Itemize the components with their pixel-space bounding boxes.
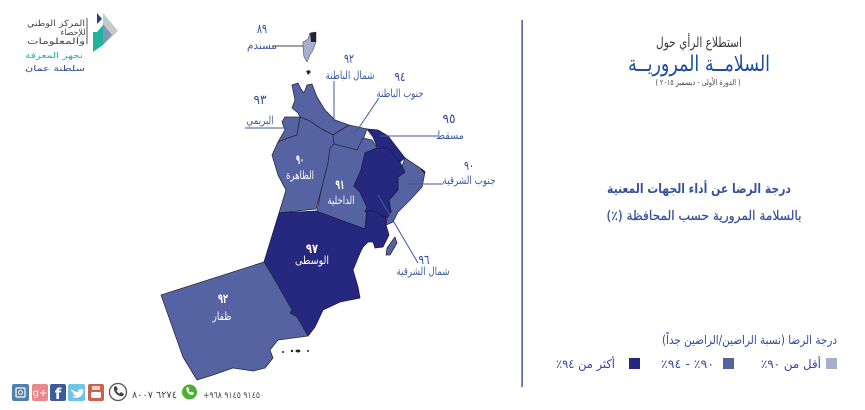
icon: instagram xyxy=(12,384,29,401)
legend title: درجة الرضا (نسبة الراضين/الراضين جداً) xyxy=(662,331,837,348)
label: South Batinah: جنوب الباطنة xyxy=(376,87,424,100)
chart subtitle: بالسلامة المرورية حسب المحافظة (٪) xyxy=(606,209,802,224)
label: Dhahirah xyxy=(286,153,314,182)
legend item: below 90: أقل من ٩٠٪ xyxy=(761,356,821,372)
region: South Sharqiyah xyxy=(386,158,425,225)
label: Dakhiliyah: الداخلية xyxy=(328,194,354,207)
label: Buraimi: البريمي xyxy=(246,114,274,127)
region: North Sharqiyah xyxy=(354,148,405,218)
label: Dakhiliyah: ٩١ xyxy=(336,178,344,193)
whatsapp number: +٩٦٨ ٩١٤٥ ٩١٤٥ xyxy=(203,391,260,401)
label: North Batinah: ٩٢ xyxy=(344,52,354,67)
toll free number: ٨٠٠٧ ٦٢٧٤ xyxy=(132,390,177,401)
label: Dhahirah: ٩٠ xyxy=(296,153,304,168)
label: Buraimi xyxy=(245,93,288,128)
logo text: نجهز المعرفة xyxy=(25,51,83,60)
cape tip xyxy=(420,169,425,174)
label: North Sharqiyah xyxy=(378,195,450,278)
label: Muscat: ٩٥ xyxy=(442,112,456,127)
logo text: المركز الوطني xyxy=(27,19,85,29)
label: Buraimi: ٩٣ xyxy=(254,93,267,108)
icon: facebook xyxy=(50,384,66,403)
region: Dhofar xyxy=(161,262,308,380)
logo text: للإحصاء xyxy=(60,28,86,38)
legend item: 90 to 94: ٩٠٪ - ٩٤٪ xyxy=(661,357,714,371)
chart subtitle xyxy=(606,180,802,224)
icon: whatsapp xyxy=(182,384,197,400)
label: Musandam: مسندم xyxy=(247,39,277,52)
legend item: above 94: أكثر من ٩٤٪ xyxy=(556,356,615,372)
logo: national centre for statistics and information xyxy=(25,13,118,73)
region: North Batinah xyxy=(292,83,349,135)
label: Musandam: ٨٩ xyxy=(257,22,267,37)
label: Wusta: ٩٧ xyxy=(306,242,318,257)
region: Musandam xyxy=(303,32,316,75)
label: South Sharqiyah xyxy=(407,159,496,187)
icon: google plus xyxy=(32,384,48,401)
icon: google plus: g+ xyxy=(33,388,47,399)
icon: facebook: f xyxy=(55,385,62,403)
label: Dhofar xyxy=(212,292,232,323)
label: Wusta: الوسطى xyxy=(295,254,329,267)
edition note: ( الدورة الأولى - ديسمبر ٢٠١٥ ) xyxy=(656,77,740,87)
region: Dhahirah xyxy=(272,117,334,213)
vertical divider xyxy=(522,20,523,387)
label: North Batinah xyxy=(326,52,374,123)
icon: youtube xyxy=(88,384,104,401)
icon: twitter xyxy=(68,384,85,401)
region: South Batinah xyxy=(333,125,367,150)
region: Wusta xyxy=(264,210,389,336)
label: North Sharqiyah: ٩٦ xyxy=(418,253,430,268)
label: South Sharqiyah: ٩٠ xyxy=(464,159,474,174)
legend item: below 90 xyxy=(761,356,837,372)
label: Muscat xyxy=(380,112,464,142)
label: South Sharqiyah: جنوب الشرقية xyxy=(442,174,496,187)
chart subtitle: درجة الرضا عن أداء الجهات المعنية xyxy=(607,180,791,197)
legend xyxy=(556,331,837,372)
logo text: والمعلومات xyxy=(27,37,85,47)
map of Oman by governorate xyxy=(161,32,425,380)
region: Muscat xyxy=(367,129,405,162)
region: Buraimi xyxy=(278,117,300,142)
label: Musandam xyxy=(247,22,303,52)
region: Dakhiliyah xyxy=(316,138,377,229)
heading: survey on: استطلاع الرأي حول xyxy=(656,33,742,51)
legend item: above 94 xyxy=(556,356,640,372)
label: North Sharqiyah: شمال الشرقية xyxy=(396,265,450,278)
logo text xyxy=(25,18,88,73)
label: Wusta xyxy=(295,242,329,267)
label: Dakhiliyah xyxy=(328,178,354,207)
islands: Hallaniyat xyxy=(282,350,309,353)
logo text: سلطنة عمان xyxy=(25,64,85,73)
label: South Batinah: ٩٤ xyxy=(394,70,406,85)
social media and contact bar xyxy=(12,384,260,403)
label: North Batinah: شمال الباطنة xyxy=(326,69,374,82)
label: Dhofar: ظفار xyxy=(212,310,232,323)
heading block xyxy=(628,33,770,87)
icon: phone xyxy=(110,384,126,400)
island: Masirah xyxy=(386,237,397,255)
logo mark xyxy=(93,13,118,52)
label: Muscat: مسقط xyxy=(436,129,464,142)
label: South Batinah xyxy=(356,70,424,132)
title: road safety: السلامــة المروريــة xyxy=(628,52,770,77)
label: Dhofar: ٩٢ xyxy=(218,292,228,307)
label: Dhahirah: الظاهرة xyxy=(286,169,314,182)
